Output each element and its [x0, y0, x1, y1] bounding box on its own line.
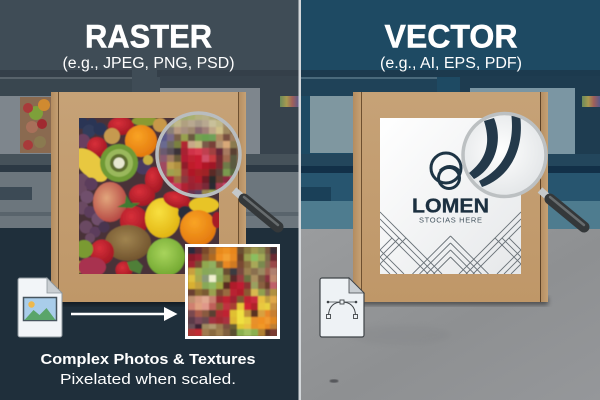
logo wordmark: LOMEN: [412, 196, 489, 218]
vector background office scene: [301, 0, 600, 400]
icon: lomen logo: [431, 153, 461, 188]
raster background office scene: [0, 0, 299, 400]
logo label: [380, 118, 521, 274]
vector subtitle: (e.g., AI, EPS, PDF): [380, 55, 522, 72]
raster title: RASTER: [85, 18, 212, 54]
vector title: VECTOR: [384, 18, 518, 54]
cardboard box: vector: [353, 92, 548, 305]
arrow: [71, 307, 178, 321]
logo tagline: STOCIAS HERE: [419, 216, 482, 224]
magnified logo lens: [464, 112, 546, 196]
magnifier: raster: [154, 108, 278, 227]
panel: vector: [301, 0, 600, 400]
magnifier handle: [540, 190, 584, 227]
magnifier ring: [157, 113, 240, 196]
cardboard box: raster: [51, 92, 246, 305]
panel: raster: [0, 0, 299, 400]
magnifier ring: [463, 114, 546, 196]
raster subtitle: (e.g., JPEG, PNG, PSD): [62, 55, 235, 72]
raster caption heading: Complex Photos & Textures: [40, 351, 256, 368]
fruit photograph: [79, 118, 219, 274]
geometric chevron pattern: [380, 212, 521, 274]
magnifier: vector: [463, 112, 584, 227]
icon: vector file: [320, 278, 364, 337]
pixelated lens mosaic: [158, 115, 238, 194]
raster caption text: Pixelated when scaled.: [60, 371, 236, 388]
icon: raster image file: [18, 278, 62, 337]
pixelated fruit inset: [184, 243, 281, 340]
magnifier handle: [234, 190, 278, 227]
